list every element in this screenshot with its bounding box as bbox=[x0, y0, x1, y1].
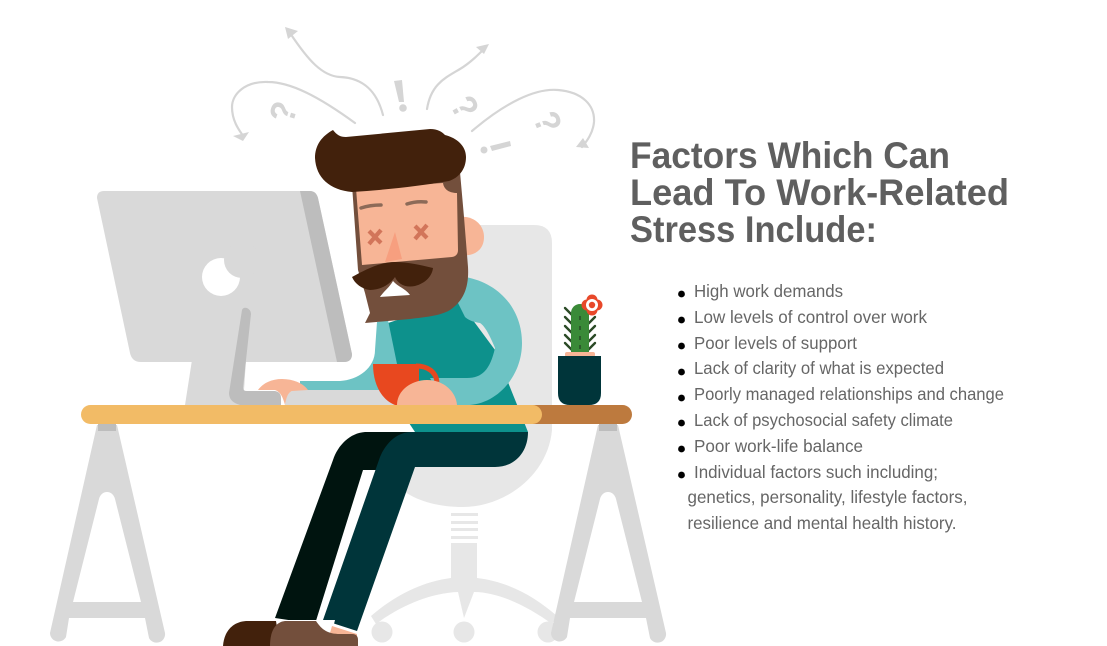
ear bbox=[458, 217, 484, 255]
soil bbox=[565, 352, 595, 357]
question and dash symbols: ? bbox=[525, 106, 569, 139]
monitor logo bbox=[202, 242, 260, 296]
arrowheads bbox=[233, 27, 589, 148]
arrows bbox=[232, 33, 594, 147]
pot bbox=[558, 356, 601, 405]
moustache bbox=[352, 262, 433, 290]
nose bbox=[385, 232, 402, 262]
man's rear leg bbox=[275, 432, 415, 624]
heading: Stress Include: bbox=[630, 209, 877, 250]
cactus in pot bbox=[558, 294, 602, 405]
question and dash symbols: ? bbox=[442, 89, 486, 126]
list text: resilience and mental health history. bbox=[688, 513, 956, 533]
list text: Poorly managed relationships and change bbox=[694, 384, 1004, 404]
man's head bbox=[315, 129, 484, 323]
computer monitor bbox=[97, 191, 352, 405]
bullets bbox=[678, 291, 685, 478]
left hand bbox=[258, 379, 308, 405]
desk top bbox=[81, 405, 632, 424]
left desk leg bbox=[50, 424, 165, 643]
list text: High work demands bbox=[694, 281, 843, 301]
flower bbox=[582, 294, 602, 316]
coffee cup bbox=[373, 364, 437, 405]
question and dash symbols: ? bbox=[262, 97, 306, 128]
man's left arm bbox=[300, 320, 397, 390]
chair post stripes bbox=[451, 513, 478, 539]
office chair bbox=[371, 225, 558, 642]
chair back and seat bbox=[405, 225, 552, 507]
list text: Lack of psychosocial safety climate bbox=[694, 410, 953, 430]
cactus spines bbox=[565, 308, 595, 350]
keyboard bbox=[285, 390, 395, 405]
man's torso bbox=[388, 300, 528, 432]
heading: Factors Which Can bbox=[630, 135, 950, 176]
list text: Poor work-life balance bbox=[694, 436, 863, 456]
back shoe bbox=[223, 621, 280, 646]
heading: Lead To Work-Related bbox=[630, 172, 1009, 213]
mouth bbox=[380, 281, 410, 297]
list text: Poor levels of support bbox=[694, 333, 857, 353]
bulleted list of factors bbox=[678, 281, 1004, 533]
exclamation mark bbox=[394, 80, 407, 112]
chair gap beside torso bbox=[480, 310, 495, 347]
right hand on cup bbox=[397, 380, 457, 405]
chair post and base bbox=[371, 543, 557, 624]
shoes bbox=[223, 620, 358, 646]
list text bbox=[688, 281, 1004, 533]
question and dash symbols bbox=[262, 89, 569, 154]
cactus marks bbox=[579, 316, 581, 349]
illustration: stressed man at desk bbox=[50, 27, 666, 646]
eyebrows bbox=[361, 202, 426, 208]
beard bbox=[352, 172, 468, 323]
front shoe bbox=[270, 621, 358, 646]
man's right arm bbox=[430, 277, 522, 405]
list text: Individual factors such including; bbox=[694, 462, 938, 482]
monitor stand arm bbox=[229, 308, 281, 405]
man's front leg bbox=[323, 432, 528, 631]
hair bbox=[315, 129, 466, 192]
list text: genetics, personality, lifestyle factors, bbox=[688, 487, 968, 507]
right desk leg bbox=[551, 424, 666, 643]
cactus body bbox=[571, 304, 589, 353]
heading bbox=[630, 135, 1009, 250]
list text: Lack of clarity of what is expected bbox=[694, 358, 944, 378]
chair wheels bbox=[372, 622, 558, 642]
crossed-out eyes bbox=[369, 225, 427, 244]
face bbox=[356, 183, 458, 265]
stress arrows and symbols above head bbox=[232, 27, 594, 154]
socks bbox=[272, 620, 335, 632]
list text: Low levels of control over work bbox=[694, 307, 927, 327]
